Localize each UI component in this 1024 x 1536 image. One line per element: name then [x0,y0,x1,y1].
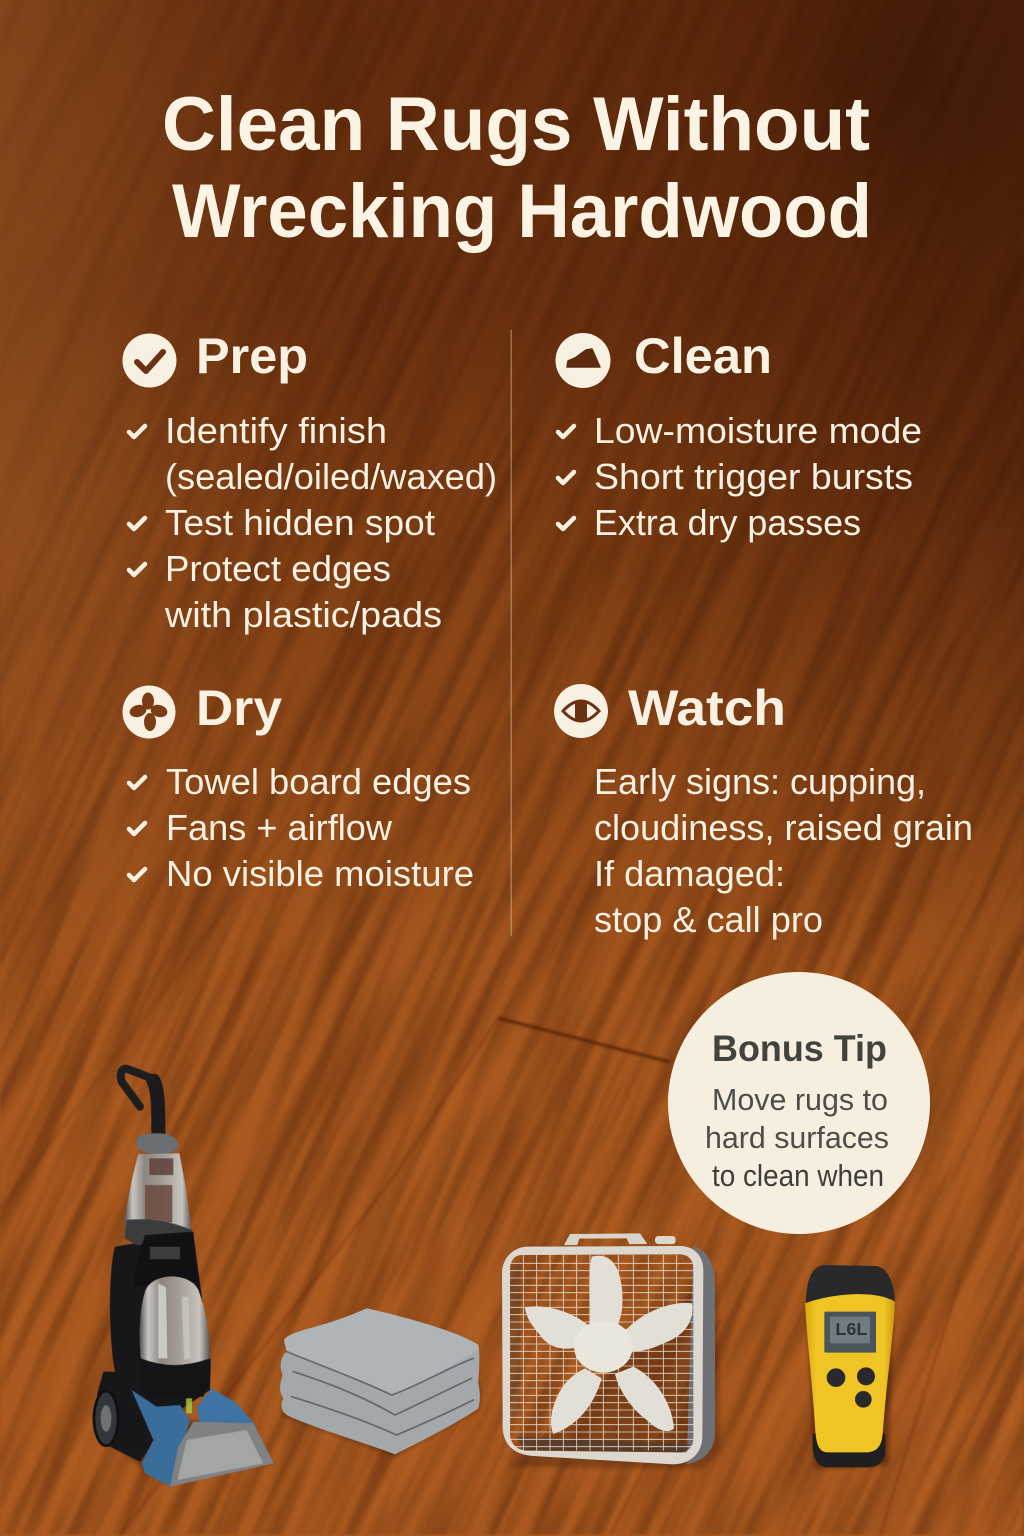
collar [136,1133,179,1154]
callout: bonus tip: hard surfaces [705,1120,889,1155]
text: watch signs: Early signs: cupping, [594,761,926,802]
list: dry steps: Towel board edges [166,761,471,802]
callout: bonus tip: Bonus Tip [712,1028,887,1069]
icon: folded towels [280,1308,480,1457]
text: watch signs [594,761,973,940]
callout: bonus tip: to clean when [712,1158,884,1193]
list: clean steps: Short trigger bursts [594,456,913,497]
icon: carpet cleaner machine [94,1069,274,1487]
handle [564,1233,647,1245]
icon: check circle [122,334,176,388]
icon: moisture meter [805,1265,895,1468]
callout: bonus tip: Move rugs to [712,1082,888,1117]
wheel [94,1391,118,1446]
icon: cloud circle [556,333,610,388]
list: prep steps: Test hidden spot [165,502,435,543]
heading: prep: Prep [196,328,308,384]
list: clean steps: Low-moisture mode [594,410,922,451]
list: prep steps: Identify finish [165,410,387,451]
title: Clean Rugs Without [162,82,870,167]
text: watch signs: If damaged: [594,853,785,894]
text: watch signs: stop & call pro [594,899,823,940]
clear nozzle [170,1422,274,1487]
title: Wrecking Hardwood [172,169,872,254]
panel: dry [122,680,474,894]
divider [510,330,512,936]
list: prep steps [129,410,497,635]
rear body [95,1233,211,1462]
icon: fan circle [122,686,176,738]
panel: prep [122,328,497,635]
list: clean steps [558,410,922,543]
heading: dry: Dry [196,680,282,736]
frame [502,1246,703,1464]
screen [824,1312,876,1353]
heading: watch: Watch [628,680,786,736]
list: prep steps: (sealed/oiled/waxed) [165,456,497,497]
list: dry steps: No visible moisture [166,853,474,894]
panel: watch [554,680,973,940]
list: dry steps [129,761,474,894]
list: prep steps: Protect edges [165,548,391,589]
callout: bonus tip [668,972,930,1234]
icon: eye circle [554,684,608,738]
lower tank [140,1276,210,1365]
text: watch signs: cloudiness, raised grain [594,807,973,848]
buttons [827,1368,845,1387]
mid band [133,1232,198,1287]
icon: moisture meter: L6L [835,1319,867,1339]
heading: clean: Clean [634,328,772,384]
side depth [687,1246,715,1464]
body [805,1294,895,1452]
blades [525,1256,693,1434]
top cap [806,1265,895,1308]
blue nozzle base [132,1390,190,1487]
upper tank [125,1153,192,1237]
title [162,82,872,254]
inner shade [517,1437,690,1452]
list: clean steps: Extra dry passes [594,502,861,543]
grille [510,1255,693,1451]
icon: box fan [502,1233,720,1468]
handle [153,1081,158,1132]
list: dry steps: Fans + airflow [166,807,393,848]
list: prep steps: with plastic/pads [164,594,442,635]
bottom cap [813,1433,885,1467]
panel: clean [556,328,922,543]
